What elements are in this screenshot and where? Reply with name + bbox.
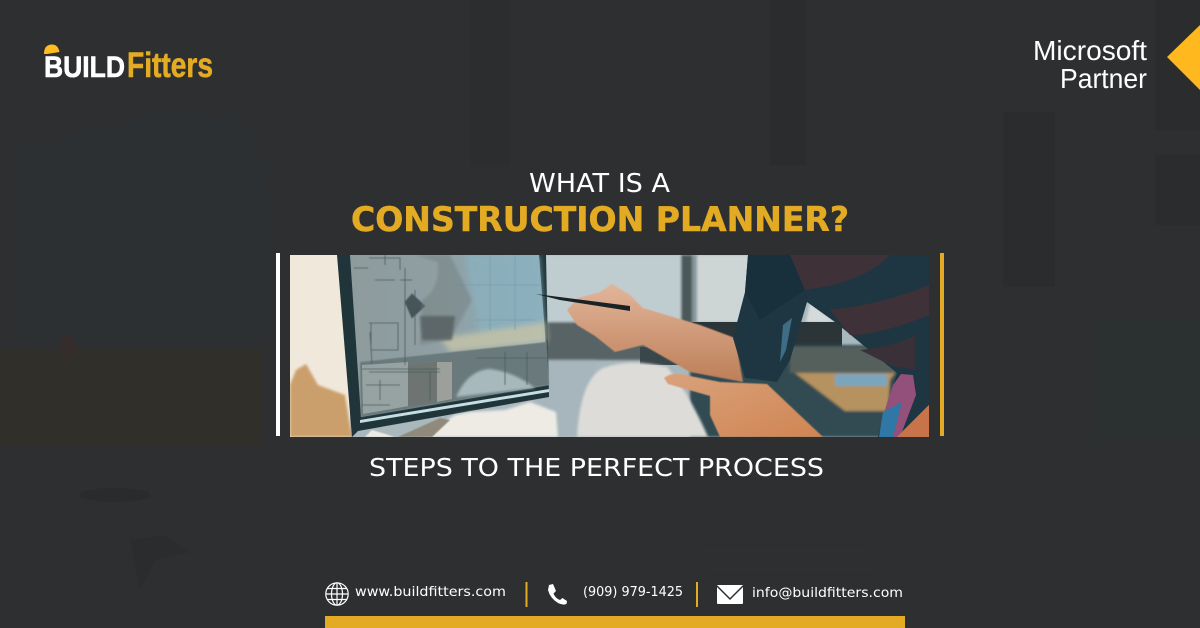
desk and wall [290, 255, 352, 437]
icon: yellow diamond [1167, 25, 1200, 90]
footer bar [325, 616, 905, 628]
icon: phone [548, 584, 567, 605]
logo: BuildFitters: Fitters [127, 46, 213, 85]
badge: Microsoft Partner: Microsoft [1033, 35, 1147, 66]
heading: what is a: WHAT IS A [529, 169, 670, 199]
accent bar: yellow [940, 253, 944, 436]
contact: website: www.buildfitters.com [355, 584, 506, 600]
striped shirt [733, 255, 929, 437]
divider [526, 582, 528, 607]
photo: team reviewing blueprints on a monitor [290, 255, 929, 437]
pointing hand [664, 374, 823, 437]
icon: globe [326, 583, 348, 605]
contact: phone [548, 584, 683, 605]
icon: envelope [717, 585, 743, 604]
contact: phone: (909) 979-1425 [583, 584, 683, 600]
subheading: steps to the perfect process: STEPS TO THE PERFECT PROCESS [369, 453, 824, 482]
logo: BuildFitters: BUILD [44, 51, 125, 84]
icon: hard hat [44, 44, 60, 54]
pen [536, 294, 630, 311]
divider [696, 582, 698, 607]
contact: email [717, 585, 903, 604]
contact: website [326, 583, 506, 605]
badge: Microsoft Partner [1033, 25, 1200, 94]
window background [535, 255, 900, 437]
monitor [337, 255, 558, 437]
raised arm and hand [567, 284, 743, 382]
hard hat [577, 363, 708, 437]
heading: construction planner: CONSTRUCTION PLANNER? [351, 200, 849, 240]
logo: BuildFitters [44, 44, 213, 85]
badge: Microsoft Partner: Partner [1060, 63, 1147, 94]
contact: email: info@buildfitters.com [752, 585, 903, 601]
accent bar: white [276, 253, 280, 436]
